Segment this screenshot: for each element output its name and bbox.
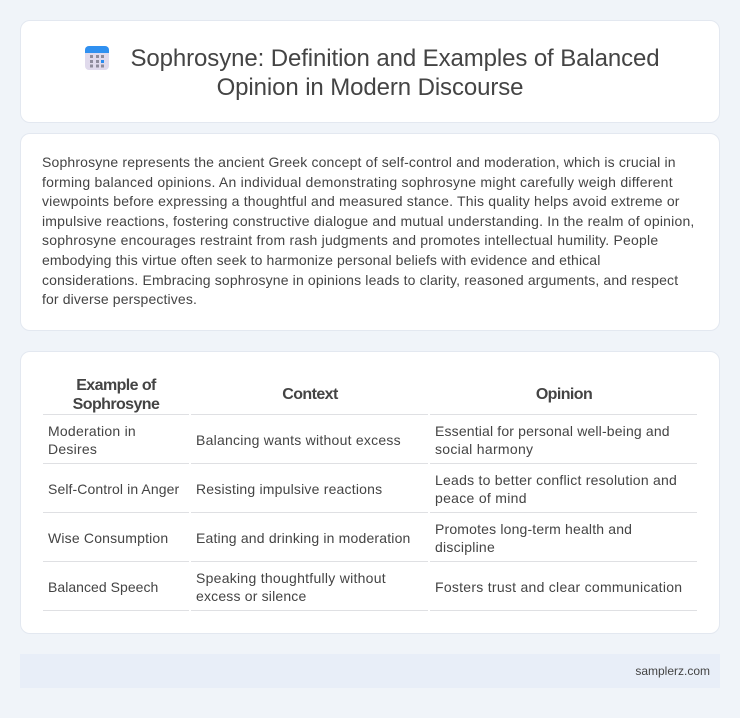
title: Opinion in Modern Discourse <box>217 74 523 101</box>
intro paragraph text: impulsive reactions, fostering constructive dialogue and mutual understanding. In the realm of opinion, <box>42 213 695 229</box>
row 3 <box>48 521 632 555</box>
row 3: Promotes long-term health and <box>435 521 632 537</box>
intro paragraph text: sophrosyne encourages restraint from rash judgments and promotes intellectual humility. People <box>42 232 658 248</box>
table header: context: Context <box>282 386 338 403</box>
intro paragraph text: considerations. Embracing sophrosyne in opinions leads to clarity, reasoned arguments, and respect <box>42 272 678 288</box>
table header: opinion: Opinion <box>536 386 592 403</box>
icon: calendar <box>85 46 109 70</box>
row 4: Balanced Speech <box>48 579 158 595</box>
row 3: Wise Consumption <box>48 530 168 546</box>
footer bar <box>20 654 720 688</box>
title <box>131 45 659 101</box>
row 1: social harmony <box>435 441 533 457</box>
row 2 <box>48 472 677 506</box>
intro paragraph text: embodying this virtue often seek to harmonize personal beliefs with evidence and ethical <box>42 252 600 268</box>
table panel <box>20 351 720 634</box>
row 3: discipline <box>435 539 495 555</box>
row 4 <box>48 570 682 604</box>
footer text: samplerz.com <box>635 664 710 678</box>
row 4: Fosters trust and clear communication <box>435 579 682 595</box>
title: Sophrosyne: Definition and Examples of Balanced <box>131 45 659 72</box>
intro paragraph text <box>42 154 695 307</box>
header panel <box>20 20 720 123</box>
row 1 <box>48 423 670 457</box>
intro paragraph text: forming balanced opinions. An individual demonstrating sophrosyne might carefully weigh different <box>42 174 673 190</box>
row 3: Eating and drinking in moderation <box>196 530 411 546</box>
intro paragraph text: Sophrosyne represents the ancient Greek concept of self-control and moderation, which is crucial in <box>42 154 676 170</box>
row 1: Balancing wants without excess <box>196 432 401 448</box>
row 1: Moderation in <box>48 423 136 439</box>
intro paragraph panel <box>20 133 720 331</box>
row 4: excess or silence <box>196 588 306 604</box>
table header: example: Example of <box>76 377 156 394</box>
row 4: Speaking thoughtfully without <box>196 570 386 586</box>
row 2: Resisting impulsive reactions <box>196 481 382 497</box>
intro paragraph text: viewpoints before expressing a thoughtful and measured stance. This quality helps avoid extreme or <box>42 193 680 209</box>
row 2: Leads to better conflict resolution and <box>435 472 677 488</box>
row 2: Self-Control in Anger <box>48 481 179 497</box>
row 1: Desires <box>48 441 97 457</box>
intro paragraph text: for diverse perspectives. <box>42 291 197 307</box>
row 1: Essential for personal well-being and <box>435 423 670 439</box>
table header: example: Sophrosyne <box>73 396 159 413</box>
row 2: peace of mind <box>435 490 527 506</box>
table header: example <box>73 377 160 413</box>
